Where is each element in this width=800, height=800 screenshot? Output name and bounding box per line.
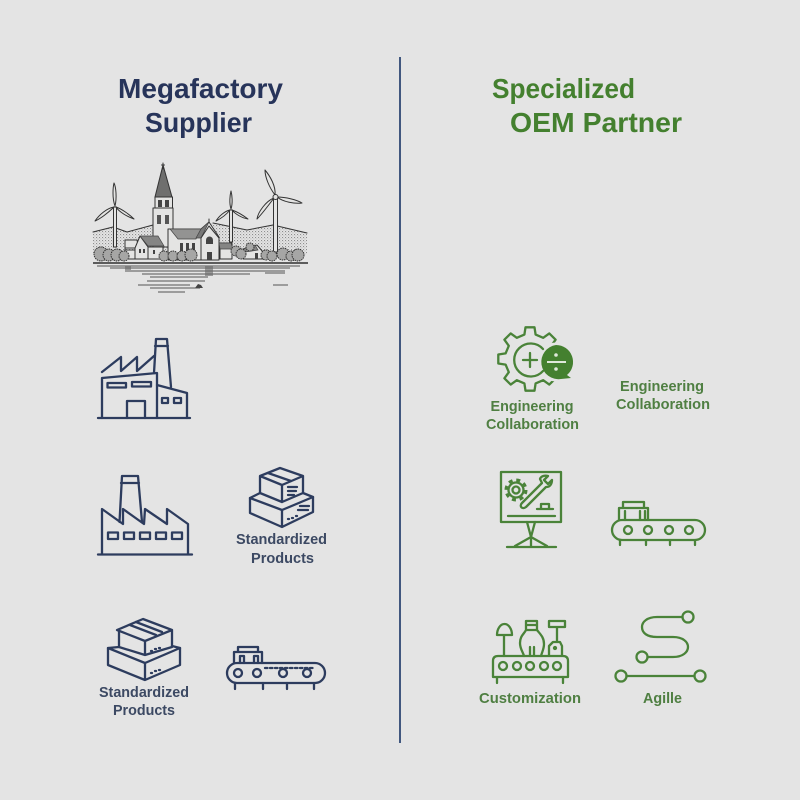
icon: stacked boxes lower bbox=[108, 619, 180, 680]
icon: customization machine bbox=[493, 621, 568, 683]
church bbox=[153, 163, 219, 260]
heading: Megafactory Supplier: Supplier bbox=[145, 107, 252, 138]
turbine middle bbox=[216, 191, 248, 242]
panel: specialized OEM partner bbox=[479, 73, 710, 707]
shoreline and water bbox=[93, 263, 308, 292]
label: Standardized Products upper: Products bbox=[251, 550, 314, 567]
icon: presentation board with gear and wrench bbox=[501, 472, 561, 547]
label: Standardized Products lower bbox=[99, 684, 189, 719]
heading: Megafactory Supplier: Megafactory bbox=[118, 73, 283, 104]
label: Customization: Customization bbox=[479, 690, 581, 707]
heading: Megafactory Supplier bbox=[118, 73, 283, 138]
icon: factory with chimney bbox=[98, 339, 190, 418]
label: Agille: Agille bbox=[643, 690, 682, 707]
icon: sawtooth factory bbox=[98, 476, 192, 554]
label: Engineering Collaboration left bbox=[486, 398, 579, 433]
label: Engineering Collaboration right: Engineering bbox=[620, 378, 704, 395]
turbine left bbox=[95, 183, 134, 247]
label: Standardized Products upper bbox=[236, 531, 327, 567]
cottages bbox=[125, 236, 263, 259]
heading: Specialized OEM Partner: Specialized bbox=[492, 73, 635, 104]
label: Standardized Products lower: Standardized bbox=[99, 684, 189, 701]
label: Standardized Products upper: Standardized bbox=[236, 531, 327, 548]
icon: conveyor green bbox=[612, 502, 705, 545]
heading: Specialized OEM Partner: OEM Partner bbox=[510, 107, 682, 138]
trees bbox=[94, 243, 304, 261]
divider bbox=[399, 57, 401, 743]
icon: gear with bubble bbox=[498, 327, 576, 391]
panel: megafactory supplier bbox=[93, 73, 327, 719]
label: Standardized Products lower: Products bbox=[113, 702, 175, 719]
label: Engineering Collaboration left: Collaboration bbox=[486, 416, 579, 433]
label: Engineering Collaboration right bbox=[616, 378, 710, 413]
label: Engineering Collaboration right: Collaboration bbox=[616, 396, 710, 413]
icon: stacked boxes upper bbox=[250, 468, 313, 527]
icon: conveyor navy bbox=[227, 647, 325, 689]
label: Engineering Collaboration left: Engineering bbox=[490, 398, 574, 415]
turbine right bbox=[257, 170, 302, 252]
illustration: village with church and wind turbines bbox=[93, 163, 308, 292]
icon: agile path bbox=[616, 612, 706, 682]
heading: Specialized OEM Partner bbox=[492, 73, 682, 138]
